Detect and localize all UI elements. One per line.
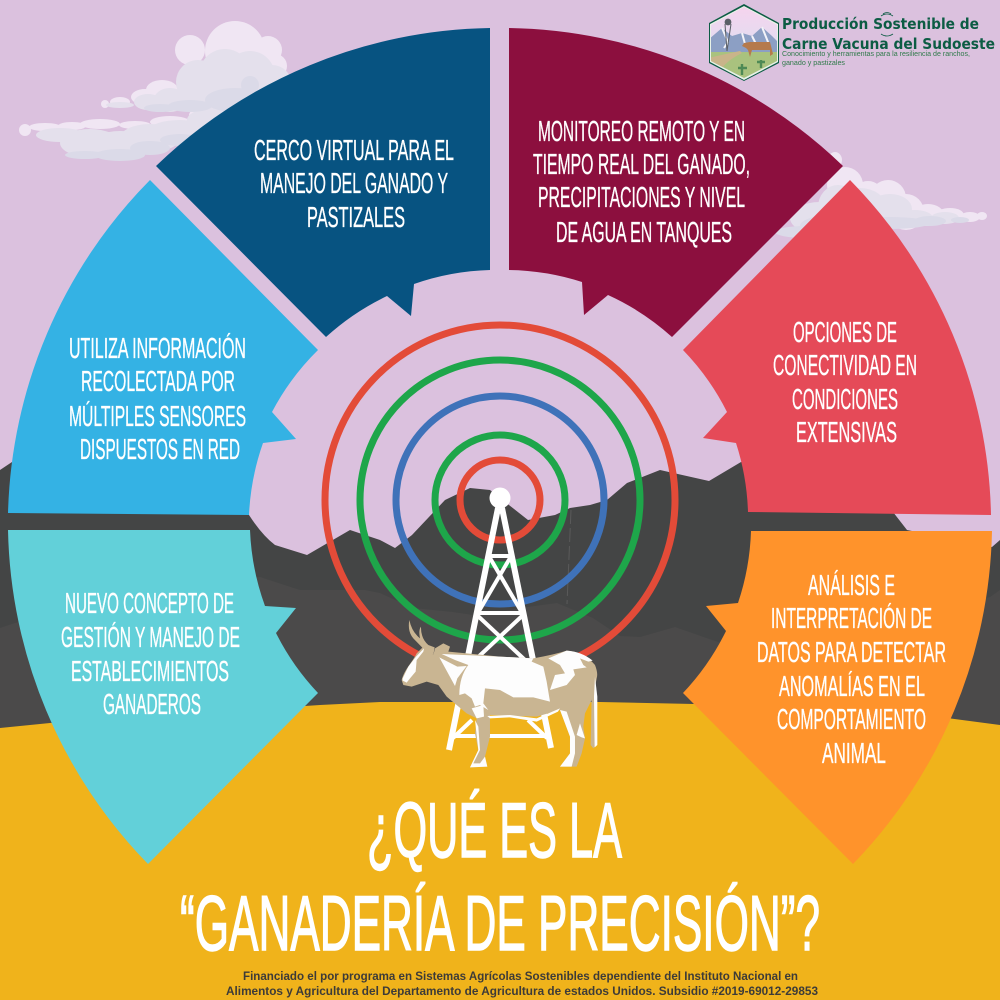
text: sensores en red: DISPUESTOS EN RED	[80, 434, 240, 466]
text: analisis de datos: ANIMAL	[822, 738, 886, 770]
icon: radio tower	[449, 488, 551, 750]
title	[180, 786, 820, 967]
text: monitoreo remoto: MONITOREO REMOTO Y EN	[538, 116, 745, 148]
panel: cerco virtual	[156, 28, 490, 337]
text: monitoreo remoto: TIEMPO REAL DEL GANADO,	[533, 149, 750, 181]
footer funding note	[226, 971, 818, 998]
text: conectividad: CONDICIONES	[792, 384, 898, 416]
signal rings	[325, 325, 675, 675]
cloud: right	[775, 152, 987, 238]
text: cerco virtual: PASTIZALES	[307, 202, 405, 234]
logo: hexagon emblem	[709, 4, 779, 81]
logo: title text	[782, 15, 995, 53]
text: monitoreo remoto	[533, 116, 750, 249]
logo: subtitle: ganado y pastizales	[782, 60, 845, 67]
text: conectividad: EXTENSIVAS	[796, 417, 897, 449]
cloud: upper left	[19, 21, 292, 161]
text: conectividad: OPCIONES DE	[793, 317, 897, 349]
panel: conectividad	[683, 180, 991, 515]
text: nuevo concepto	[61, 588, 240, 721]
text: monitoreo remoto: PRECIPITACIONES Y NIVEL	[538, 182, 745, 214]
cow horns	[409, 620, 435, 655]
back mountain range	[0, 462, 1000, 740]
logo: subtitle: Conocimiento y herramientas para la resiliencia de ranchos,	[782, 51, 970, 58]
logo: subtitle	[782, 51, 970, 67]
cow body silhouette	[402, 643, 597, 767]
yellow hill ground	[0, 702, 1000, 1000]
title: ¿QUÉ ES LA	[367, 786, 622, 874]
text: nuevo concepto: NUEVO CONCEPTO DE	[65, 588, 234, 620]
text: sensores en red: UTILIZA INFORMACIÓN	[69, 333, 246, 365]
text: sensores en red: RECOLECTADA POR	[81, 366, 235, 398]
text: monitoreo remoto: DE AGUA EN TANQUES	[556, 217, 732, 249]
text: analisis de datos: ANÁLISIS E	[808, 570, 895, 602]
text: nuevo concepto: ESTABLECIMIENTOS	[71, 656, 229, 688]
text: analisis de datos	[757, 570, 946, 770]
dashed antenna line	[567, 510, 571, 604]
text: cerco virtual: CERCO VIRTUAL PARA EL	[254, 135, 454, 167]
text: sensores en red	[69, 333, 246, 466]
panel: monitoreo remoto	[509, 28, 843, 337]
cow white patches	[403, 648, 597, 767]
icon: cow	[402, 620, 597, 767]
text: nuevo concepto: GESTIÓN Y MANEJO DE	[61, 622, 240, 654]
text: nuevo concepto: GANADEROS	[103, 689, 201, 721]
text: conectividad	[773, 317, 917, 449]
text: cerco virtual: MANEJO DEL GANADO Y	[260, 168, 448, 200]
text: cerco virtual	[254, 135, 454, 234]
text: sensores en red: MÚLTIPLES SENSORES	[69, 401, 246, 433]
panel: sensores en red	[8, 180, 318, 515]
footer funding note: Alimentos y Agricultura del Departamento de Agricultura de estados Unidos. Subsidio #2019-69012-29853	[226, 986, 818, 998]
logo: title text: Producción Sostenible de	[782, 15, 979, 33]
panel: nuevo concepto	[8, 530, 318, 864]
panel: analisis de datos	[683, 531, 992, 864]
footer funding note: Financiado el por programa en Sistemas Agrícolas Sostenibles dependiente del Instituto Nacional en	[243, 971, 798, 983]
logo: signal arcs over the S	[881, 12, 893, 36]
cow tail	[591, 677, 597, 748]
front mountain range	[0, 577, 1000, 740]
